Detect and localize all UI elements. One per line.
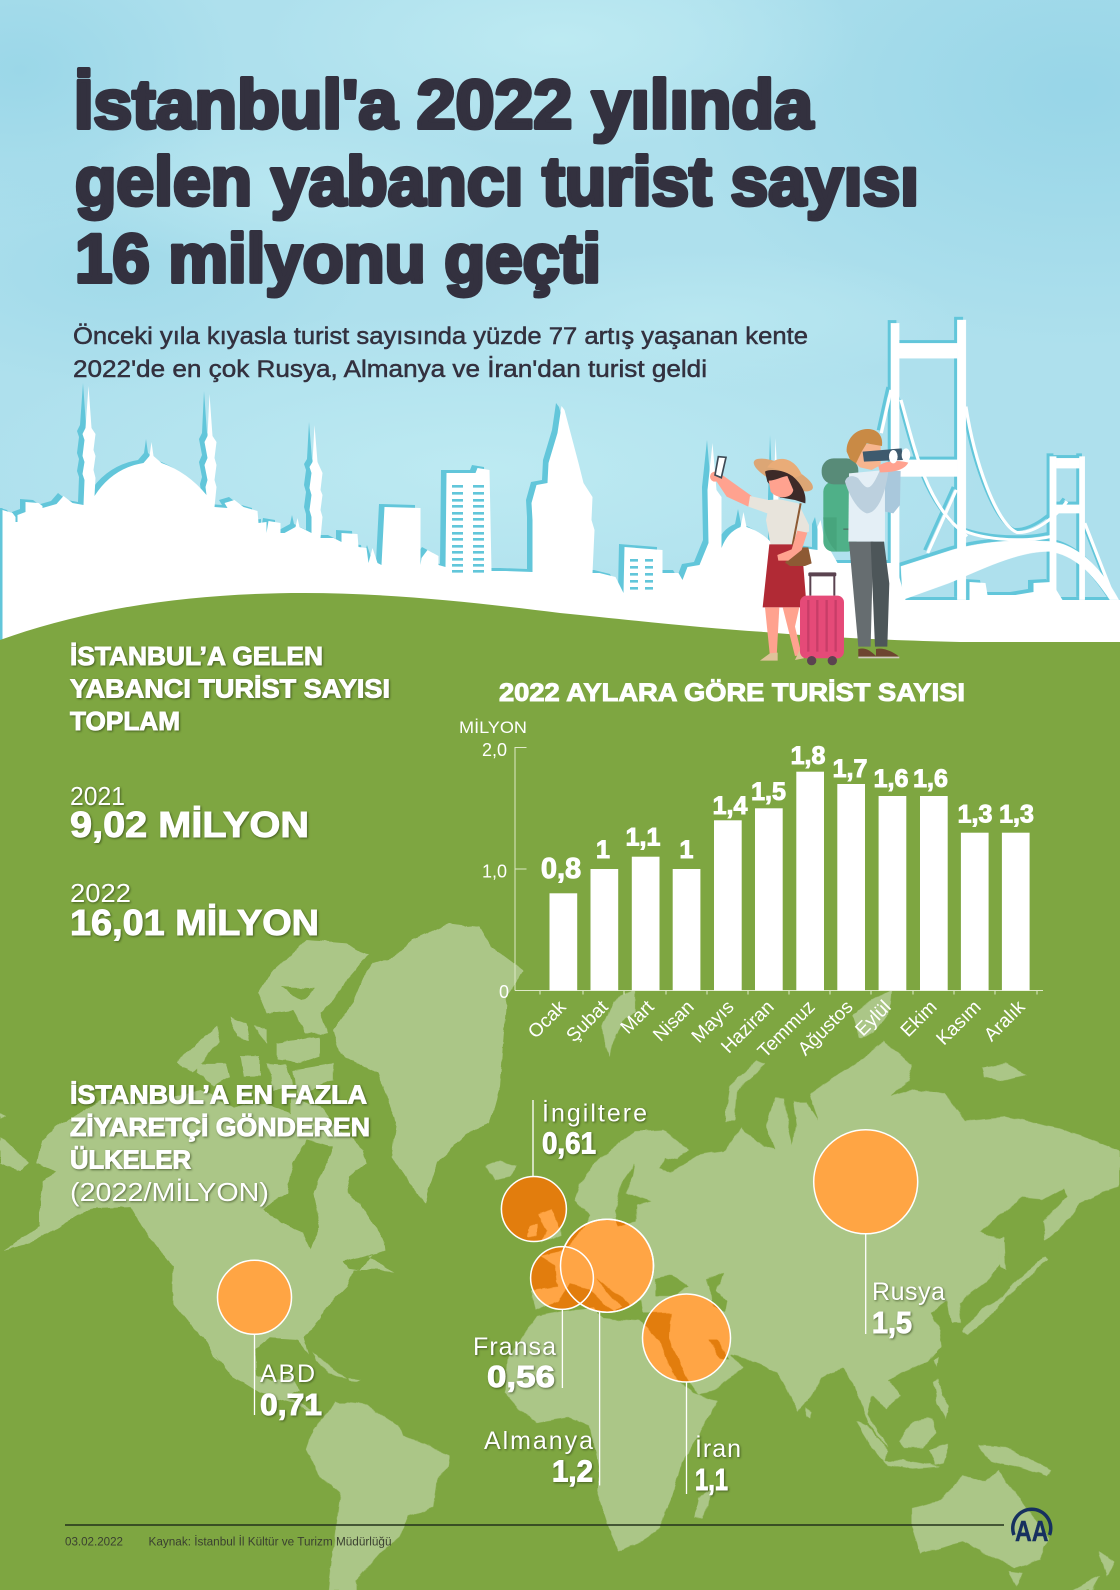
icon: AA logo: AA: [1015, 1516, 1049, 1548]
bar values: 0,8: [541, 853, 581, 885]
bar values: 1,5: [751, 778, 786, 806]
heading: total foreign tourists: TOPLAM: [70, 706, 180, 736]
bar values: 1: [596, 836, 610, 864]
heading: top visitor countries: İSTANBUL’A EN FAZLA: [70, 1080, 367, 1110]
illustration: tourist couple: [710, 429, 910, 665]
subtitle: [73, 323, 808, 383]
month labels: Aralık: [980, 996, 1030, 1046]
month labels: Temmuz: [754, 997, 820, 1062]
y axis: 1,0: [482, 862, 507, 882]
footer source line: 03.02.2022: [65, 1536, 123, 1548]
month labels: Eylül: [852, 997, 896, 1041]
y axis: 2,0: [482, 740, 507, 760]
callout: Rusya: 1,5: [872, 1305, 912, 1340]
world map: [0, 923, 1120, 1590]
callout: ABD: 0,71: [260, 1387, 322, 1422]
heading: top visitor countries: [70, 1080, 370, 1207]
bar values: 1,7: [833, 755, 867, 783]
icon: AA logo: [1013, 1509, 1051, 1548]
stat: 2021: 2021: [70, 781, 125, 811]
callout: Fransa: 0,56: [487, 1359, 555, 1394]
bars: [550, 772, 1030, 990]
callout: Fransa: Fransa: [473, 1333, 556, 1361]
stat: 2022: 16,01 MİLYON: [70, 902, 319, 943]
callout: İran: [592, 1218, 742, 1498]
callout: Rusya: Rusya: [872, 1278, 945, 1306]
title: [74, 66, 919, 297]
stat: 2022: 2022: [70, 878, 131, 908]
heading: total foreign tourists: İSTANBUL’A GELEN: [70, 641, 323, 671]
stat: 2022: [70, 878, 319, 943]
callout: Rusya: [814, 1130, 945, 1340]
bar values: 1,4: [713, 792, 747, 820]
heading: total foreign tourists: YABANCI TURİST SAYISI: [70, 674, 390, 704]
callout: İran: 1,1: [695, 1462, 728, 1497]
month labels: Ağustos: [794, 997, 858, 1060]
callout: Almanya: [484, 1210, 654, 1489]
woman: [710, 452, 817, 661]
bar values: 1,3: [999, 800, 1034, 828]
subtitle: Önceki yıla kıyasla turist sayısında yüzde 77 artış yaşanan kente: [73, 323, 808, 350]
bar values: 1: [680, 836, 694, 864]
callout: Fransa: [474, 1218, 654, 1395]
bar values: [541, 742, 1034, 885]
month labels: Şubat: [563, 996, 613, 1047]
callout: Almanya: 1,2: [552, 1454, 593, 1488]
title: gelen yabancı turist sayısı: [75, 143, 919, 220]
sky background with clouds: [0, 0, 1120, 700]
bar chart: tourists by month: MİLYON: [459, 718, 527, 737]
callout: Almanya: Almanya: [484, 1427, 593, 1455]
heading: top visitor countries: (2022/MİLYON): [70, 1177, 269, 1207]
stat: 2021: [70, 781, 309, 845]
month labels: Mart: [617, 996, 659, 1038]
bar values: 1,6: [913, 765, 948, 793]
month labels: Ekim: [897, 997, 942, 1041]
callout: İran: İran: [695, 1434, 741, 1463]
heading: top visitor countries: ZİYARETÇİ GÖNDEREN: [70, 1112, 370, 1142]
month labels: [524, 996, 1030, 1062]
callout: İngiltere: İngiltere: [542, 1098, 647, 1128]
footer source line: Kaynak: İstanbul İl Kültür ve Turizm Müdürlüğü: [148, 1536, 392, 1548]
man: [822, 429, 910, 658]
month labels: Kasım: [933, 997, 986, 1050]
y axis: 0: [499, 982, 509, 1002]
y axis: [482, 740, 1043, 1002]
footer source line: [65, 1525, 1004, 1548]
bar chart: tourists by month: [459, 718, 1043, 1062]
icon: suitcase handle behind: [810, 574, 834, 596]
bar values: 1,1: [626, 824, 660, 852]
month labels: Nisan: [649, 997, 699, 1046]
callout: İngiltere: 0,61: [542, 1126, 596, 1160]
stat: 2021: 9,02 MİLYON: [70, 804, 309, 845]
bar values: 1,3: [958, 800, 992, 828]
skyline of Istanbul with bridge: [0, 317, 1120, 700]
title: 16 milyonu geçti: [75, 220, 601, 297]
heading: total foreign tourists: [70, 641, 390, 736]
bar values: 1,8: [791, 742, 825, 770]
icon: suitcase: [800, 572, 844, 665]
month labels: Ocak: [524, 996, 571, 1043]
green ground with hill: [0, 593, 1120, 1590]
subtitle: 2022'de en çok Rusya, Almanya ve İran'dan turist geldi: [73, 356, 707, 383]
chart title: 2022 AYLARA GÖRE TURİST SAYISI: [499, 678, 965, 707]
callout: ABD: ABD: [260, 1360, 315, 1388]
month labels: Mayıs: [688, 997, 739, 1047]
heading: top visitor countries: ÜLKELER: [70, 1144, 191, 1174]
title: İstanbul'a 2022 yılında: [74, 66, 814, 143]
bar values: 1,6: [874, 765, 908, 793]
callout: İngiltere: [500, 1100, 648, 1242]
month labels: Haziran: [717, 997, 779, 1058]
callout: ABD: [218, 1260, 322, 1422]
